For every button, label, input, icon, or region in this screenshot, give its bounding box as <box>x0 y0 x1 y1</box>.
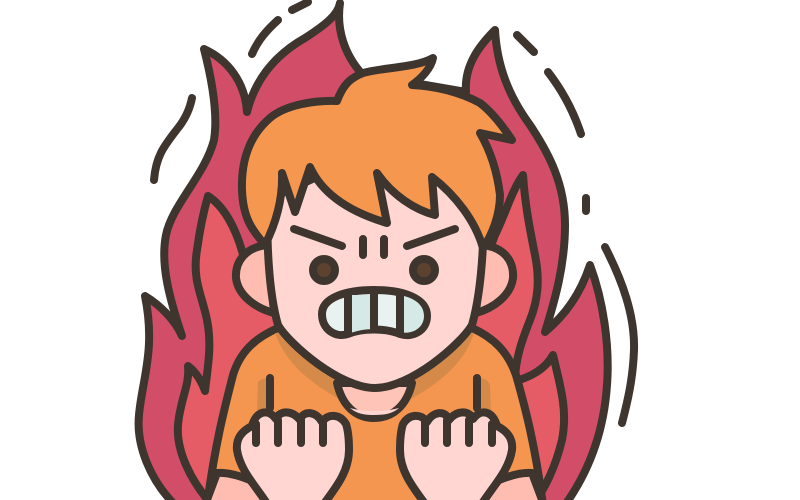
left arm <box>205 473 272 500</box>
left eye <box>313 259 335 281</box>
frown lines <box>363 239 384 255</box>
shirt shadow <box>257 333 491 412</box>
left ear <box>236 245 274 313</box>
shirt <box>207 328 543 500</box>
right fist <box>400 378 512 500</box>
right eye <box>413 259 435 281</box>
right arm <box>477 473 544 500</box>
right eyebrow <box>407 229 455 246</box>
motion lines <box>154 2 634 423</box>
hair <box>242 58 512 248</box>
outer flame <box>139 3 608 500</box>
right ear <box>476 245 513 313</box>
neck <box>337 383 412 418</box>
left fist <box>237 378 349 500</box>
inner flame <box>178 175 564 500</box>
mouth with teeth <box>322 290 427 335</box>
face <box>267 150 484 388</box>
left eyebrow <box>294 229 342 246</box>
